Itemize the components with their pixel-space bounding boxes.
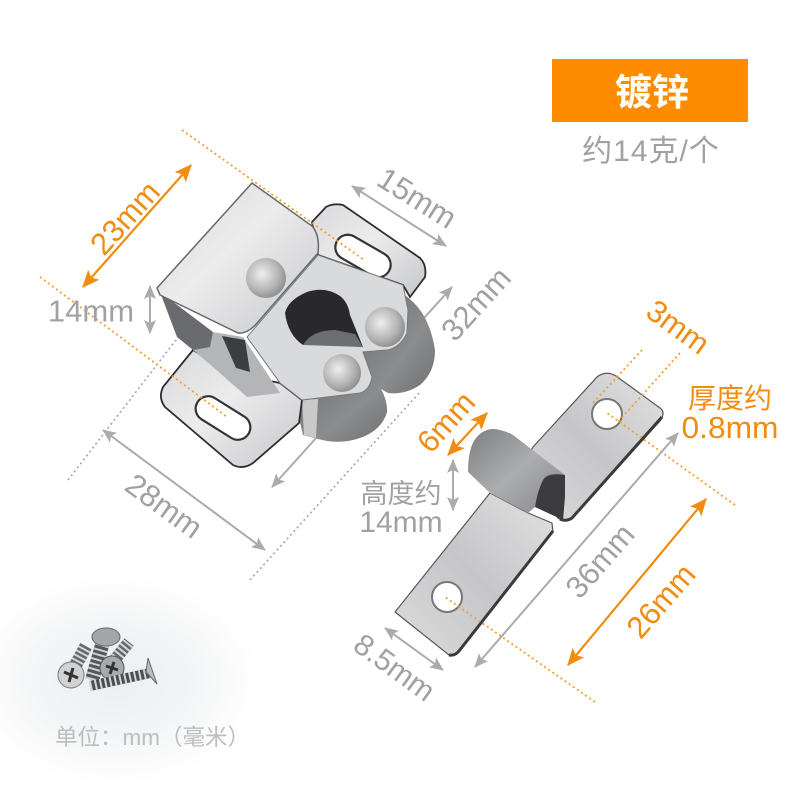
dimension: 23mm (83, 165, 191, 287)
dimension: 26mm: 26mm (620, 557, 702, 645)
dimension: thickness (682, 383, 778, 445)
icon: screws (58, 628, 157, 688)
dimension: thickness: 厚度约 (688, 383, 772, 414)
screw holes (592, 399, 622, 429)
dimension: 14mm height: 14mm (48, 294, 134, 328)
center opening (285, 290, 363, 347)
lower leaf dark edge (449, 531, 553, 655)
roller axle edge (302, 399, 318, 438)
dimension: thickness: 0.8mm (682, 410, 778, 445)
top plate (157, 183, 318, 333)
badge: finish: 镀锌 (615, 72, 689, 113)
screw 3 (100, 642, 129, 680)
badge: finish (552, 59, 748, 122)
inner dark recess (222, 336, 250, 372)
back flange slot (331, 230, 395, 282)
dimension: 32mm (272, 260, 518, 487)
rivets (246, 258, 286, 298)
dimension: strike height: 14mm (359, 506, 443, 539)
dimension: 8.5mm: 8.5mm (347, 628, 441, 708)
screw 2 (92, 628, 120, 680)
dimension: 32mm: 32mm (434, 260, 518, 348)
middle plate (247, 255, 408, 400)
dimension: 6mm: 6mm (410, 385, 482, 459)
icon: roller latch (157, 183, 435, 467)
hump (468, 429, 565, 513)
lower flange (161, 350, 302, 467)
left roller (296, 370, 387, 442)
dimension: 3mm: 3mm (640, 293, 716, 361)
screw 4 (90, 658, 157, 686)
dimension: 36mm: 36mm (559, 517, 641, 605)
text: weight: 约14克/个 (582, 135, 720, 168)
shiny inner body (193, 332, 280, 397)
dimension: 26mm (568, 499, 706, 665)
dimension: strike height: 高度约 (360, 479, 442, 509)
icon: strike plate (395, 373, 663, 656)
dimension: 36mm (475, 433, 678, 667)
hump opening (535, 474, 565, 520)
dimension: 28mm (103, 430, 265, 550)
side shadow (160, 292, 213, 350)
upper leaf dark edge (560, 417, 662, 520)
lower flange slot (191, 392, 255, 444)
upper leaf (520, 373, 663, 520)
back flange (312, 204, 425, 297)
lower leaf (395, 493, 553, 656)
dimension: 15mm: 15mm (371, 160, 463, 236)
opening floor (303, 330, 363, 347)
dimension: 28mm: 28mm (119, 467, 209, 545)
dimension: strike height (359, 460, 453, 539)
text: unit note: 单位：mm（毫米） (55, 725, 250, 750)
screw 1 (58, 646, 86, 688)
orange guide lines (40, 130, 735, 702)
gray guide lines (68, 340, 420, 580)
dimension: 14mm height (48, 286, 150, 333)
dimension: 23mm: 23mm (83, 174, 167, 262)
soft shadow behind screws (0, 575, 260, 785)
right roller (360, 295, 435, 393)
